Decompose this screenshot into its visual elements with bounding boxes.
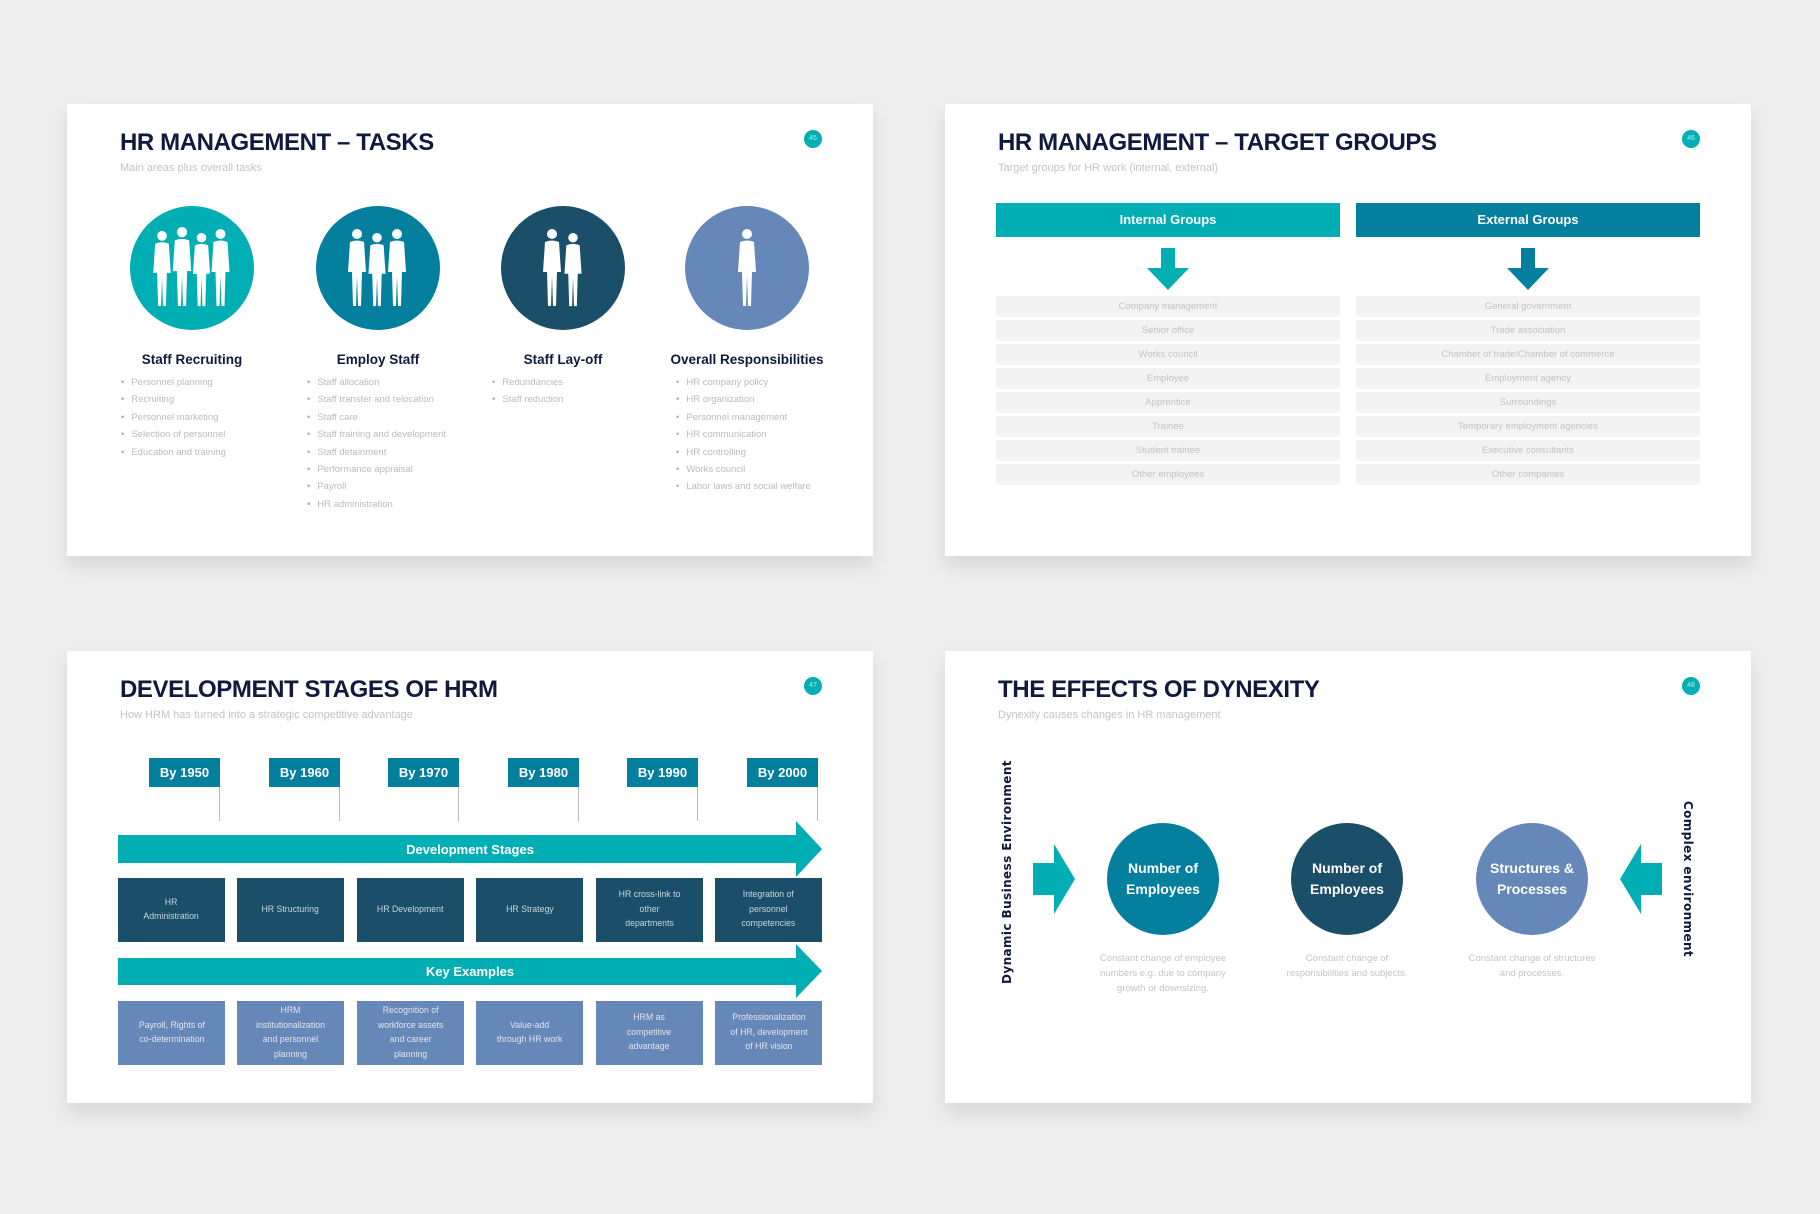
stage boxes: Administration: [144, 911, 199, 922]
icon: lay-off pair: [501, 206, 625, 330]
list: employ: Staff care: [317, 412, 358, 423]
stage boxes: competencies: [742, 918, 795, 929]
stage boxes: HR Development: [377, 904, 444, 915]
example boxes: planning: [394, 1048, 427, 1060]
list: internal groups: Company management: [1119, 301, 1217, 312]
example boxes: HRM: [281, 1005, 300, 1016]
example boxes: Value-add: [510, 1020, 549, 1030]
circle: number of employees: Employees: [1126, 881, 1200, 897]
badge: page 47: [804, 677, 822, 695]
caption 3: Constant change of structures and processes.: [1469, 953, 1595, 979]
circle: number of employees dark: Number of: [1312, 860, 1382, 876]
icon: recruiting group: [130, 206, 254, 330]
timeline flags: By 1970: [399, 765, 448, 780]
arrow: key examples: [118, 944, 822, 998]
list: employ: HR administration: [317, 499, 393, 510]
list: employ: Staff allocation: [317, 377, 379, 388]
list: internal groups: Senior office: [1142, 325, 1194, 336]
list: overall: [676, 377, 811, 492]
timeline flags: By 1950: [160, 765, 209, 780]
list: internal groups: Employee: [1147, 373, 1189, 384]
list: employ: Staff training and development: [317, 429, 446, 440]
timeline flags: By 1960: [280, 765, 329, 780]
list: overall: HR communication: [686, 429, 767, 440]
header: external groups: External Groups: [1477, 212, 1579, 227]
timeline flags: By 2000: [758, 765, 807, 780]
heading: staff lay-off: Staff Lay-off: [524, 352, 602, 367]
list: employ: Payroll: [317, 481, 346, 492]
list: recruiting: [121, 377, 226, 458]
panel: effects of dynexity: [945, 651, 1751, 1103]
list: overall: Works council: [686, 464, 745, 475]
heading: staff recruiting: Staff Recruiting: [142, 352, 242, 367]
badge: page 45: [804, 130, 822, 148]
panel: HR management tasks: [67, 104, 873, 556]
stage boxes: HR Strategy: [506, 904, 553, 915]
list: internal groups: Other employees: [1132, 469, 1204, 480]
list: lay-off: Redundancies: [502, 377, 563, 388]
circle: number of employees: [1107, 823, 1219, 935]
subtitle: Target groups for HR work (internal, external): [998, 162, 1218, 174]
example boxes: Recognition of: [383, 1005, 438, 1016]
list: external groups: Other companies: [1492, 469, 1564, 480]
header: external groups: [1356, 203, 1700, 237]
stage boxes: HR: [165, 896, 178, 908]
list: internal groups: Works council: [1139, 349, 1197, 360]
example boxes: advantage: [629, 1041, 670, 1052]
icon: employ group: [316, 206, 440, 330]
list: external groups: Trade association: [1491, 325, 1565, 336]
list: external groups: Chamber of trade/Chamber of commerce: [1441, 349, 1615, 360]
arrow: internal down: [1147, 248, 1189, 290]
timeline flags: By 1980: [519, 765, 568, 780]
header: internal groups: [996, 203, 1340, 237]
list: internal groups: [996, 296, 1340, 485]
header: internal groups: Internal Groups: [1120, 212, 1216, 227]
example boxes: co-determination: [139, 1034, 204, 1045]
arrow: key examples: Key Examples: [426, 964, 514, 979]
circle: structures and processes: Structures &: [1490, 860, 1574, 876]
subtitle: Main areas plus overall tasks: [120, 162, 262, 174]
list: lay-off: Staff reduction: [502, 394, 563, 405]
title: THE EFFECTS OF DYNEXITY: [998, 676, 1320, 703]
stage boxes: [118, 878, 822, 942]
title: HR MANAGEMENT – TASKS: [120, 129, 434, 156]
list: employ: Staff transfer and relocation: [317, 394, 434, 405]
label: dynamic business environment: Dynamic Business Environment: [1000, 760, 1014, 984]
list: external groups: Executive consultants: [1482, 445, 1574, 456]
list: overall: Labor laws and social welfare: [686, 481, 811, 492]
list: internal groups: Student trainee: [1136, 445, 1200, 456]
example boxes: and career: [390, 1034, 431, 1045]
example boxes: planning: [274, 1048, 307, 1060]
example boxes: of HR vision: [745, 1041, 792, 1052]
heading: employ staff: Employ Staff: [337, 352, 419, 367]
subtitle: How HRM has turned into a strategic competitive advantage: [120, 709, 413, 721]
list: recruiting: Personnel marketing: [131, 412, 218, 423]
circle: number of employees dark: [1291, 823, 1403, 935]
list: employ: [307, 377, 446, 510]
list: external groups: Employment agency: [1485, 373, 1571, 384]
arrow: external down: [1507, 248, 1549, 290]
example boxes: workforce assets: [378, 1020, 443, 1030]
arrow: development stages: Development Stages: [406, 842, 534, 857]
list: external groups: Temporary employment agencies: [1458, 421, 1598, 432]
list: lay-off: [492, 377, 563, 405]
arrow: development stages: [118, 821, 822, 877]
stage boxes: HR Structuring: [262, 904, 319, 915]
example boxes: of HR, development: [730, 1027, 807, 1038]
example boxes: HRM as: [634, 1012, 665, 1023]
stage boxes: other: [640, 904, 659, 915]
list: recruiting: Recruiting: [131, 394, 174, 405]
caption 1: Constant change of employee numbers e.g. due to company growth or downsizing.: [1100, 953, 1226, 994]
circle: structures and processes: Processes: [1497, 881, 1567, 897]
list: employ: Performance appraisal: [317, 464, 413, 475]
list: internal groups: Trainee: [1152, 421, 1184, 432]
badge: page 45: 45: [809, 135, 817, 142]
stage boxes: HR cross-link to: [619, 889, 680, 900]
timeline flags: [149, 758, 818, 821]
badge: page 46: [1682, 130, 1700, 148]
list: overall: HR organization: [686, 394, 754, 405]
example boxes: [118, 1001, 822, 1065]
circle: number of employees dark: Employees: [1310, 881, 1384, 897]
badge: page 47: 47: [809, 682, 817, 689]
icon: single person: [685, 206, 809, 330]
list: overall: HR company policy: [686, 377, 768, 388]
badge: page 48: 48: [1687, 682, 1695, 689]
title: DEVELOPMENT STAGES OF HRM: [120, 676, 498, 703]
example boxes: through HR work: [497, 1034, 562, 1045]
example boxes: Professionalization: [732, 1012, 805, 1023]
list: overall: HR controlling: [686, 447, 746, 458]
circle: number of employees: Number of: [1128, 860, 1198, 876]
example boxes: and personnel: [263, 1034, 318, 1045]
list: internal groups: Apprentice: [1145, 397, 1191, 408]
stage boxes: departments: [625, 918, 674, 929]
list: recruiting: Personnel planning: [131, 377, 213, 388]
heading: overall responsibilities: Overall Responsibilities: [670, 352, 824, 367]
badge: page 46: 46: [1687, 135, 1695, 142]
stage boxes: personnel: [749, 904, 788, 915]
list: recruiting: Education and training: [131, 447, 226, 458]
list: external groups: General government: [1485, 301, 1571, 312]
list: external groups: [1356, 296, 1700, 485]
example boxes: institutionalization: [256, 1020, 325, 1030]
list: recruiting: Selection of personnel: [131, 429, 225, 440]
circle: structures and processes: [1476, 823, 1588, 935]
arrow: right inward: [1620, 844, 1662, 914]
list: overall: Personnel management: [686, 412, 787, 423]
badge: page 48: [1682, 677, 1700, 695]
list: employ: Staff detainment: [317, 447, 386, 458]
example boxes: Payroll, Rights of: [138, 1020, 205, 1030]
stage boxes: Integration of: [743, 889, 794, 900]
subtitle: Dynexity causes changes in HR management: [998, 709, 1221, 721]
example boxes: competitive: [627, 1027, 672, 1038]
arrow: left inward: [1033, 844, 1075, 914]
list: external groups: Surroundings: [1500, 397, 1556, 408]
title: HR MANAGEMENT – TARGET GROUPS: [998, 129, 1437, 156]
label: complex environment: Complex environment: [1681, 801, 1695, 957]
panel: target groups: [945, 104, 1751, 556]
timeline flags: By 1990: [638, 765, 687, 780]
panel: development stages: [67, 651, 873, 1103]
caption 2: Constant change of responsibilities and subjects.: [1287, 953, 1407, 979]
